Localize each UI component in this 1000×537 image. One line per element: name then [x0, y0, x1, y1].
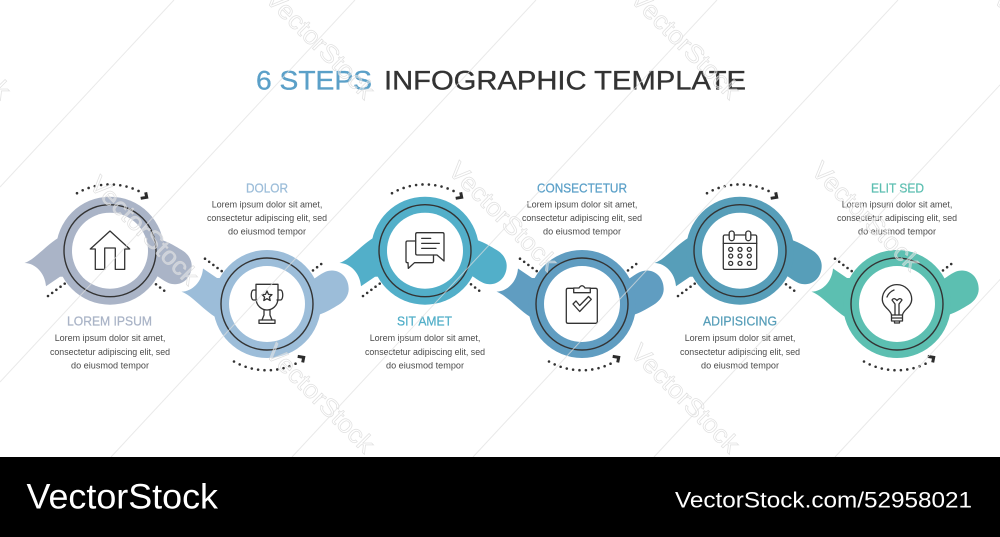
step 5 ring — [694, 205, 786, 297]
step 3 dotted decoration — [363, 184, 483, 296]
step 4 text — [522, 181, 642, 237]
step 1 text: consectetur adipiscing elit, sed — [50, 347, 170, 357]
step 2 text: Lorem ipsum dolor sit amet, — [212, 199, 322, 209]
watermark text: VectorStock — [84, 170, 204, 291]
icon: house — [90, 231, 130, 269]
step 4 text: Lorem ipsum dolor sit amet, — [527, 199, 637, 209]
icon: chat bubbles — [406, 233, 444, 268]
step 5 white disc — [702, 213, 778, 289]
step 1 text: do eiusmod tempor — [71, 360, 149, 370]
step 3 white disc — [387, 213, 463, 289]
step 2 white disc — [229, 266, 305, 342]
step 6 text: Lorem ipsum dolor sit amet, — [842, 199, 952, 209]
step 6 text: ELIT SED — [871, 181, 924, 195]
title: INFOGRAPHIC TEMPLATE — [384, 66, 746, 96]
icon: light bulb — [882, 285, 912, 323]
step 6 dotted decoration — [835, 259, 955, 370]
step 3 ring — [379, 205, 471, 297]
step 4: consectetur — [496, 250, 664, 370]
footer url: VectorStock.com/52958021 — [675, 487, 972, 512]
step 6 text: consectetur adipiscing elit, sed — [837, 213, 957, 223]
step 4 dotted decoration — [520, 259, 640, 370]
footer brand: VectorStock — [26, 477, 219, 516]
title: 6 STEPS — [256, 66, 372, 96]
step 2 text: do eiusmod tempor — [228, 227, 306, 237]
step 4 text: do eiusmod tempor — [543, 227, 621, 237]
step 5 text: consectetur adipiscing elit, sed — [680, 347, 800, 357]
step 3: sit amet — [340, 184, 507, 305]
step 1 shape — [24, 197, 192, 305]
step 2: dolor — [182, 250, 349, 370]
step 1 text — [50, 315, 170, 370]
step 5 text: do eiusmod tempor — [701, 360, 779, 370]
step 6 text: do eiusmod tempor — [858, 227, 936, 237]
step 2 text: consectetur adipiscing elit, sed — [207, 213, 327, 223]
step 2 ring — [221, 258, 313, 350]
step 3 text: SIT AMET — [397, 315, 452, 329]
step 6: elit sed — [812, 250, 979, 370]
step 4 text: consectetur adipiscing elit, sed — [522, 213, 642, 223]
step 5 text: ADIPISICING — [703, 315, 777, 329]
step 2 text — [207, 181, 327, 237]
watermark text: VectorStock — [625, 338, 745, 459]
step 2 text: DOLOR — [246, 181, 288, 195]
step 2 shape — [182, 250, 349, 358]
step 6 shape — [812, 250, 979, 358]
watermark text: VectorStock — [806, 156, 926, 277]
step 6 ring — [851, 258, 943, 350]
step 6 text — [837, 181, 957, 237]
step 1 text: Lorem ipsum dolor sit amet, — [55, 333, 165, 343]
step 5 text: Lorem ipsum dolor sit amet, — [685, 333, 795, 343]
step 3 shape — [340, 197, 507, 305]
step 1 white disc — [72, 213, 148, 289]
watermark text: VectorStock — [443, 156, 563, 277]
step 1 ring — [64, 205, 156, 297]
title — [256, 66, 746, 96]
step 4 white disc — [544, 266, 620, 342]
step 2 dotted decoration — [205, 259, 325, 370]
step 6 white disc — [859, 266, 935, 342]
icon: trophy — [251, 284, 283, 323]
step 3 text: do eiusmod tempor — [386, 360, 464, 370]
watermark text: VectorStock — [260, 338, 380, 459]
step 5 dotted decoration — [678, 184, 798, 296]
step 1: lorem ipsum — [24, 184, 192, 305]
step 5 shape — [654, 197, 822, 305]
step 3 text — [365, 315, 485, 370]
step 5: adipisicing — [654, 184, 822, 305]
step 4 shape — [496, 250, 664, 358]
step 1 text: LOREM IPSUM — [67, 315, 152, 329]
step 4 text: CONSECTETUR — [537, 181, 627, 195]
step 1 dotted decoration — [48, 184, 168, 296]
icon: clipboard — [566, 286, 597, 323]
step 5 text — [680, 315, 800, 370]
footer band — [0, 457, 1000, 537]
step 3 text: Lorem ipsum dolor sit amet, — [370, 333, 480, 343]
step 4 ring — [536, 258, 628, 350]
icon: calendar — [723, 231, 757, 269]
step 3 text: consectetur adipiscing elit, sed — [365, 347, 485, 357]
